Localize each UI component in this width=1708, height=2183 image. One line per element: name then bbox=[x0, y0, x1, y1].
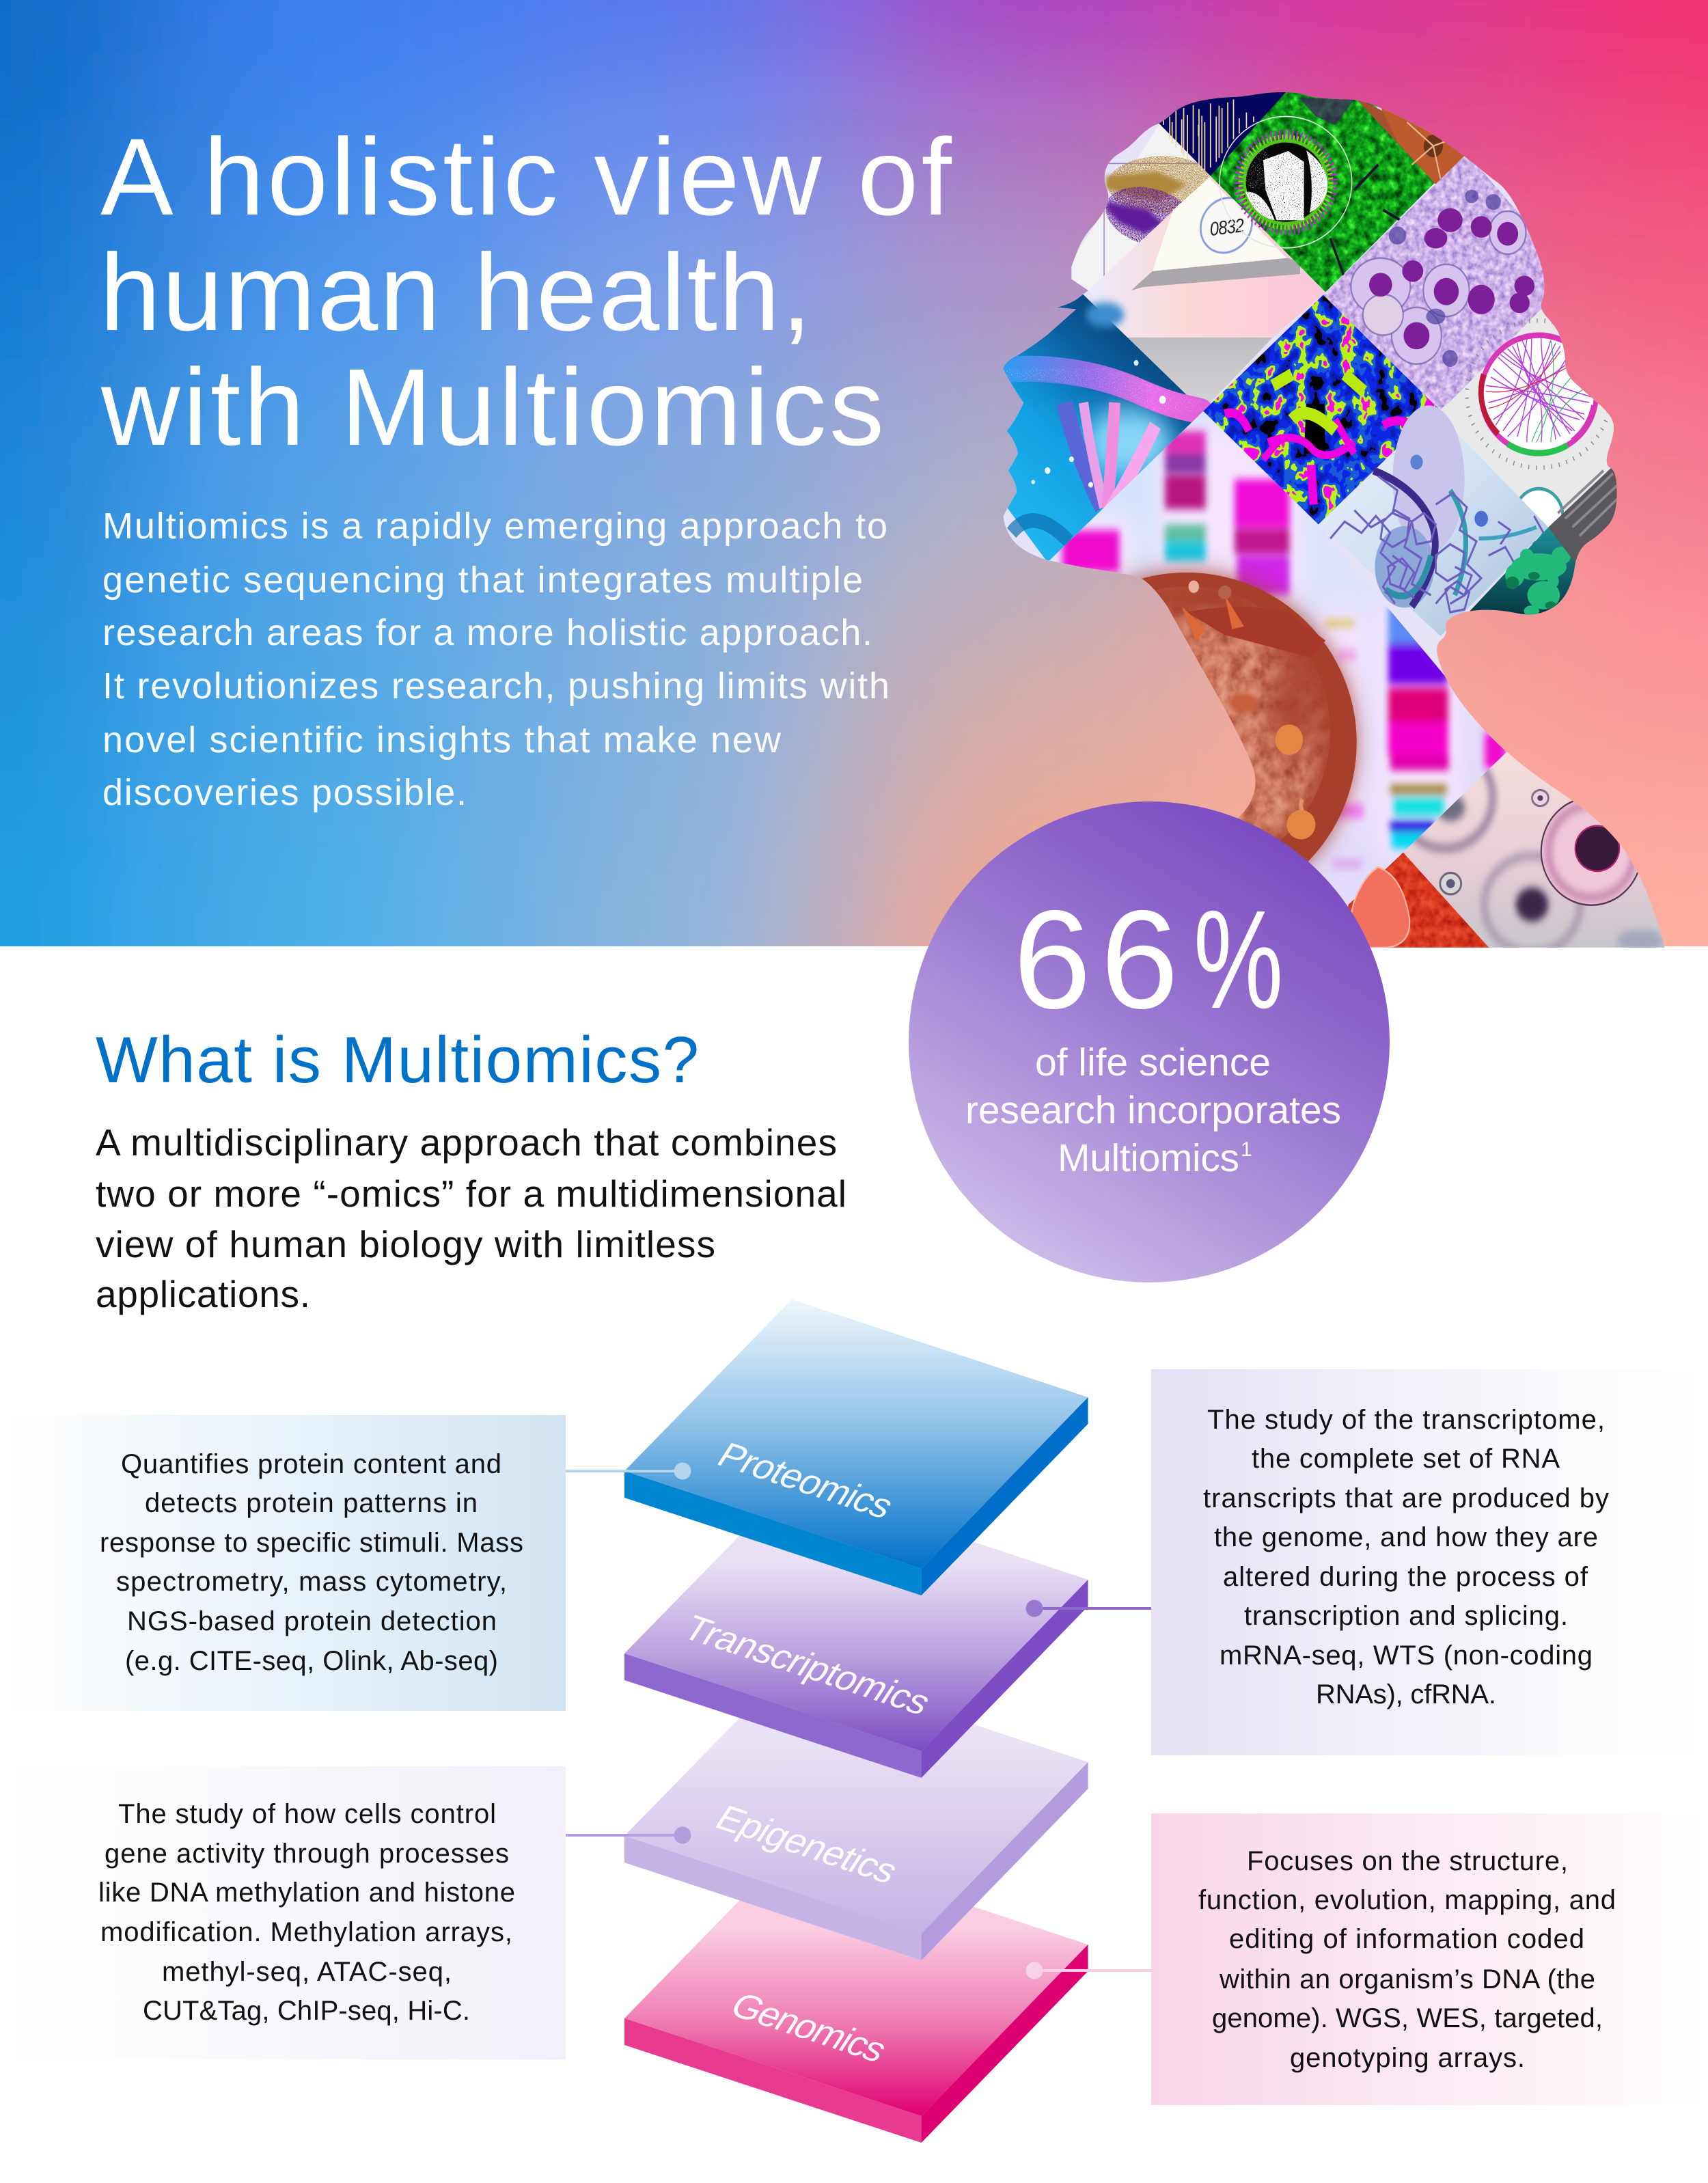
panel: proteomics description: detects protein patterns in bbox=[145, 1488, 478, 1518]
tile: green tissue scan bbox=[1211, 85, 1436, 292]
heading: A holistic view of human health, with Multiomics bbox=[100, 115, 952, 468]
definition paragraph: two or more “-omics” for a multidimensional bbox=[96, 1172, 846, 1215]
panel: genomics description: function, evolution, mapping, and bbox=[1198, 1885, 1616, 1915]
definition paragraph: A multidisciplinary approach that combines bbox=[96, 1121, 837, 1164]
definition paragraph: view of human biology with limitless bbox=[96, 1223, 715, 1265]
panel: proteomics description: (e.g. CITE-seq, Olink, Ab-seq) bbox=[125, 1646, 498, 1676]
panel: genomics description: editing of information coded bbox=[1229, 1924, 1584, 1954]
tile: DNA helix bbox=[976, 281, 1203, 562]
label: Epigenetics: Epigenetics bbox=[708, 1798, 906, 1891]
head silhouette photo mosaic bbox=[1003, 92, 1665, 948]
intro paragraph: novel scientific insights that make new bbox=[102, 719, 782, 760]
tile: heat map brain scan bbox=[1203, 295, 1438, 525]
layer: proteomics bbox=[624, 1300, 1088, 1595]
intro paragraph: research areas for a more holistic approach. bbox=[102, 612, 872, 653]
heading: A holistic view of human health, with Multiomics: human health, bbox=[100, 231, 812, 353]
panel: proteomics description: NGS-based protein detection bbox=[127, 1606, 497, 1636]
tile: instrument screen: 0832 bbox=[1209, 214, 1245, 241]
intro paragraph bbox=[102, 506, 890, 813]
statistic caption: Multiomics bbox=[1058, 1136, 1239, 1180]
layer: genomics bbox=[624, 1847, 1088, 2143]
panel: epigenetics description: The study of how cells control bbox=[118, 1799, 496, 1829]
label: Transcriptomics: Transcriptomics bbox=[676, 1608, 939, 1722]
statistic caption bbox=[965, 1041, 1341, 1180]
tile: gel electrophoresis bands bbox=[1047, 411, 1508, 907]
panel: transcriptomics description bbox=[1151, 1369, 1708, 1755]
statistic value: % bbox=[1194, 881, 1283, 1038]
statistic caption: of life science bbox=[1035, 1041, 1271, 1084]
definition paragraph bbox=[96, 1121, 846, 1315]
heading: What is Multiomics?: What is Multiomics? bbox=[96, 1024, 699, 1097]
panel: transcriptomics description: altered during the process of bbox=[1223, 1562, 1588, 1592]
panel: epigenetics description: like DNA methylation and histone bbox=[98, 1878, 515, 1908]
tile: brown neuron bbox=[1354, 96, 1467, 184]
panel: epigenetics description: CUT&Tag, ChIP-seq, Hi-C. bbox=[143, 1996, 470, 2026]
tile: gray stripes bbox=[1548, 459, 1621, 562]
panel: genomics description: within an organism’s DNA (the bbox=[1219, 1964, 1595, 1994]
tile: navy fibre signal peaks bbox=[1159, 92, 1286, 176]
panel: genomics description: Focuses on the structure, bbox=[1247, 1846, 1568, 1876]
tile: teal green protein bbox=[1465, 527, 1594, 620]
panel: epigenetics description: methyl-seq, ATAC-seq, bbox=[162, 1957, 452, 1987]
intro paragraph: genetic sequencing that integrates multiple bbox=[102, 560, 863, 601]
panel: genomics description: genotyping arrays. bbox=[1290, 2043, 1525, 2073]
panel: transcriptomics description: the genome, and how they are bbox=[1214, 1522, 1598, 1552]
panel: transcriptomics description: The study of the transcriptome, bbox=[1207, 1405, 1605, 1435]
panel: proteomics description: response to specific stimuli. Mass bbox=[100, 1528, 523, 1558]
connector: transcriptomics bbox=[1026, 1600, 1151, 1617]
intro paragraph: discoveries possible. bbox=[102, 772, 467, 813]
heading: A holistic view of human health, with Multiomics: with Multiomics bbox=[100, 346, 884, 468]
panel: proteomics description: Quantifies protein content and bbox=[121, 1449, 501, 1479]
panel: proteomics description bbox=[0, 1415, 566, 1711]
tile: red organ bbox=[1340, 853, 1489, 948]
panel: genomics description bbox=[1151, 1813, 1708, 2105]
panel: epigenetics description: modification. Methylation arrays, bbox=[100, 1917, 512, 1947]
statistic value bbox=[1013, 881, 1283, 1038]
tile: circos plot bbox=[1438, 309, 1627, 543]
statistic caption: research incorporates bbox=[965, 1088, 1341, 1132]
statistic value: 66 bbox=[1013, 881, 1188, 1038]
panel: epigenetics description: gene activity through processes bbox=[105, 1839, 509, 1869]
panel: transcriptomics description: transcription and splicing. bbox=[1244, 1601, 1568, 1631]
definition paragraph: applications. bbox=[96, 1273, 310, 1315]
layer: transcriptomics bbox=[624, 1482, 1088, 1778]
header gradient background bbox=[0, 0, 1708, 946]
label: Genomics: Genomics bbox=[723, 1986, 895, 2070]
panel: transcriptomics description: mRNA-seq, WTS (non-coding bbox=[1220, 1640, 1593, 1671]
panel: transcriptomics description: transcripts that are produced by bbox=[1203, 1483, 1609, 1513]
tile: pale cells with rings bbox=[1397, 747, 1675, 953]
panel: transcriptomics description: RNAs), cfRNA. bbox=[1316, 1679, 1496, 1710]
connector: proteomics bbox=[566, 1462, 691, 1480]
tile: virus particle bbox=[1017, 573, 1357, 913]
statistic caption: 1 bbox=[1241, 1138, 1252, 1161]
heading: A holistic view of human health, with Multiomics: A holistic view of bbox=[100, 115, 952, 238]
intro paragraph: It revolutionizes research, pushing limits with bbox=[102, 665, 890, 706]
intro paragraph: Multiomics is a rapidly emerging approach to bbox=[102, 506, 887, 547]
label: Proteomics: Proteomics bbox=[710, 1436, 902, 1526]
tile: instrument screen bbox=[1088, 176, 1325, 338]
panel: transcriptomics description: the complete set of RNA bbox=[1252, 1444, 1560, 1474]
connector: genomics bbox=[1026, 1962, 1151, 1979]
panel: genomics description: genome). WGS, WES, targeted, bbox=[1212, 2003, 1603, 2033]
connector: epigenetics bbox=[566, 1827, 691, 1843]
tile: molecule DNA model bbox=[1319, 405, 1548, 636]
callout: 66% statistic circle bbox=[909, 801, 1390, 1282]
layer: epigenetics bbox=[624, 1664, 1088, 1960]
tile: gray wedge bbox=[1125, 338, 1273, 410]
tile: scatter plot bbox=[1071, 120, 1217, 290]
panel: proteomics description: spectrometry, mass cytometry, bbox=[116, 1567, 507, 1597]
panel: epigenetics description bbox=[0, 1766, 566, 2059]
tile: purple stained cells bbox=[1323, 153, 1580, 411]
